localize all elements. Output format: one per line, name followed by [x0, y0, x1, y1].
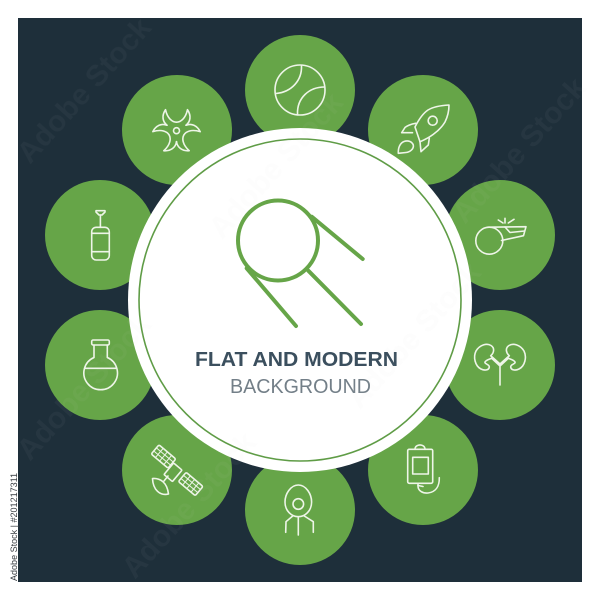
- icon: kidneys: [475, 344, 525, 385]
- watermark: Adobe Stock: [11, 11, 158, 170]
- watermark: Adobe Stock: [116, 426, 263, 585]
- icon: tennis ball: [275, 65, 325, 115]
- icon: bottle with dropper: [92, 211, 109, 260]
- watermark: Adobe Stock: [11, 308, 158, 467]
- icon: space capsule: [285, 485, 313, 535]
- icon: blood bag: [408, 445, 439, 493]
- icon: rocket: [398, 105, 449, 153]
- watermark: Adobe Stock: [341, 256, 488, 415]
- central white circle: [128, 128, 472, 472]
- subheading: BACKGROUND: [230, 376, 371, 398]
- heading: FLAT AND MODERN: [195, 349, 398, 371]
- watermark: Adobe Stock: [446, 71, 593, 230]
- watermark: Adobe Stock: [203, 86, 350, 245]
- green circles ring: [45, 35, 555, 565]
- icon: round flask: [84, 340, 117, 390]
- side credit text: Adobe Stock | #201217311: [9, 473, 19, 581]
- icon: satellite: [151, 445, 203, 496]
- icon: whistle: [476, 218, 526, 254]
- icon: biohazard: [152, 110, 201, 153]
- icon: sputnik: [238, 200, 363, 326]
